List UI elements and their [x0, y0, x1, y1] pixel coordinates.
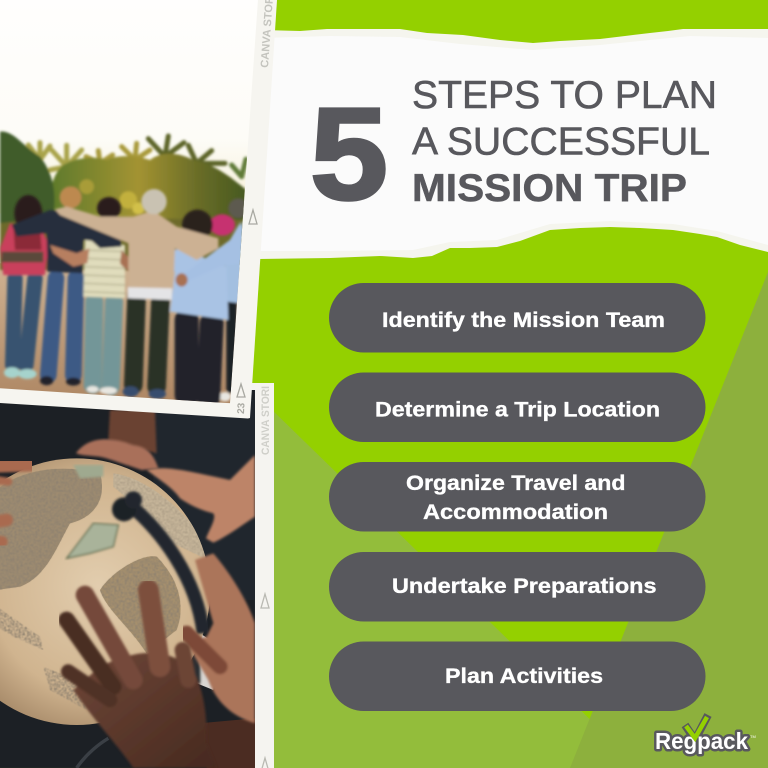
frame marker lower [237, 384, 245, 397]
photo frame: team [0, 0, 280, 423]
hand: top [76, 439, 158, 470]
step 2 pill: Determine a Trip Location [375, 398, 660, 422]
logo: Regpack: TM [750, 734, 756, 739]
step 5 pill [329, 642, 706, 711]
step 3 pill: Organize Travel and [406, 472, 626, 495]
step 4 pill: Undertake Preparations [392, 575, 656, 598]
step 3 pill [329, 462, 706, 532]
person 6 [219, 198, 248, 401]
title panel: torn paper [258, 29, 768, 259]
hand: lower right [187, 553, 255, 723]
frame marker [249, 210, 257, 224]
step 4 pill [329, 552, 706, 622]
trees [0, 132, 253, 270]
person 2 [10, 185, 92, 388]
background shape: lower left olive [268, 406, 640, 768]
globe arm [112, 491, 203, 683]
frame label: CANVA STORI [260, 386, 272, 455]
heading: steps to plan a successful mission trip: MISSION TRIP [412, 167, 687, 210]
heading number 5: 5 [310, 80, 388, 227]
hand: top right [147, 455, 255, 543]
photo: hands on a globe [0, 390, 255, 768]
step 3 pill: Accommodation [423, 501, 608, 524]
step 5 pill: Plan Activities [445, 665, 603, 688]
background shape: right olive [570, 272, 768, 768]
heading: steps to plan a successful mission trip: A SUCCESSFUL [412, 120, 710, 164]
globe stand [77, 738, 108, 768]
person 1 [0, 195, 68, 379]
frame marker lower [261, 758, 269, 768]
frame marker [261, 594, 269, 608]
person 5 [168, 208, 231, 402]
photo frame: globe [0, 383, 274, 768]
hand: left fingers [0, 465, 30, 542]
globe [0, 458, 210, 730]
photo: team with arms around each other [0, 0, 258, 404]
step 1 pill [329, 283, 706, 352]
heading: steps to plan a successful mission trip [412, 74, 717, 210]
person 4 [55, 189, 218, 399]
frame number: 23 [236, 402, 247, 414]
step 2 pill [329, 372, 706, 442]
step 1 pill: Identify the Mission Team [382, 309, 665, 332]
front arm [204, 221, 242, 268]
logo: Regpack: Regpack [655, 728, 748, 754]
person 3 [48, 195, 130, 396]
heading: steps to plan a successful mission trip: STEPS TO PLAN [412, 74, 717, 117]
flowers [210, 214, 235, 236]
people [0, 186, 248, 401]
logo: Regpack [655, 715, 756, 754]
hand: lower centre [67, 590, 217, 768]
